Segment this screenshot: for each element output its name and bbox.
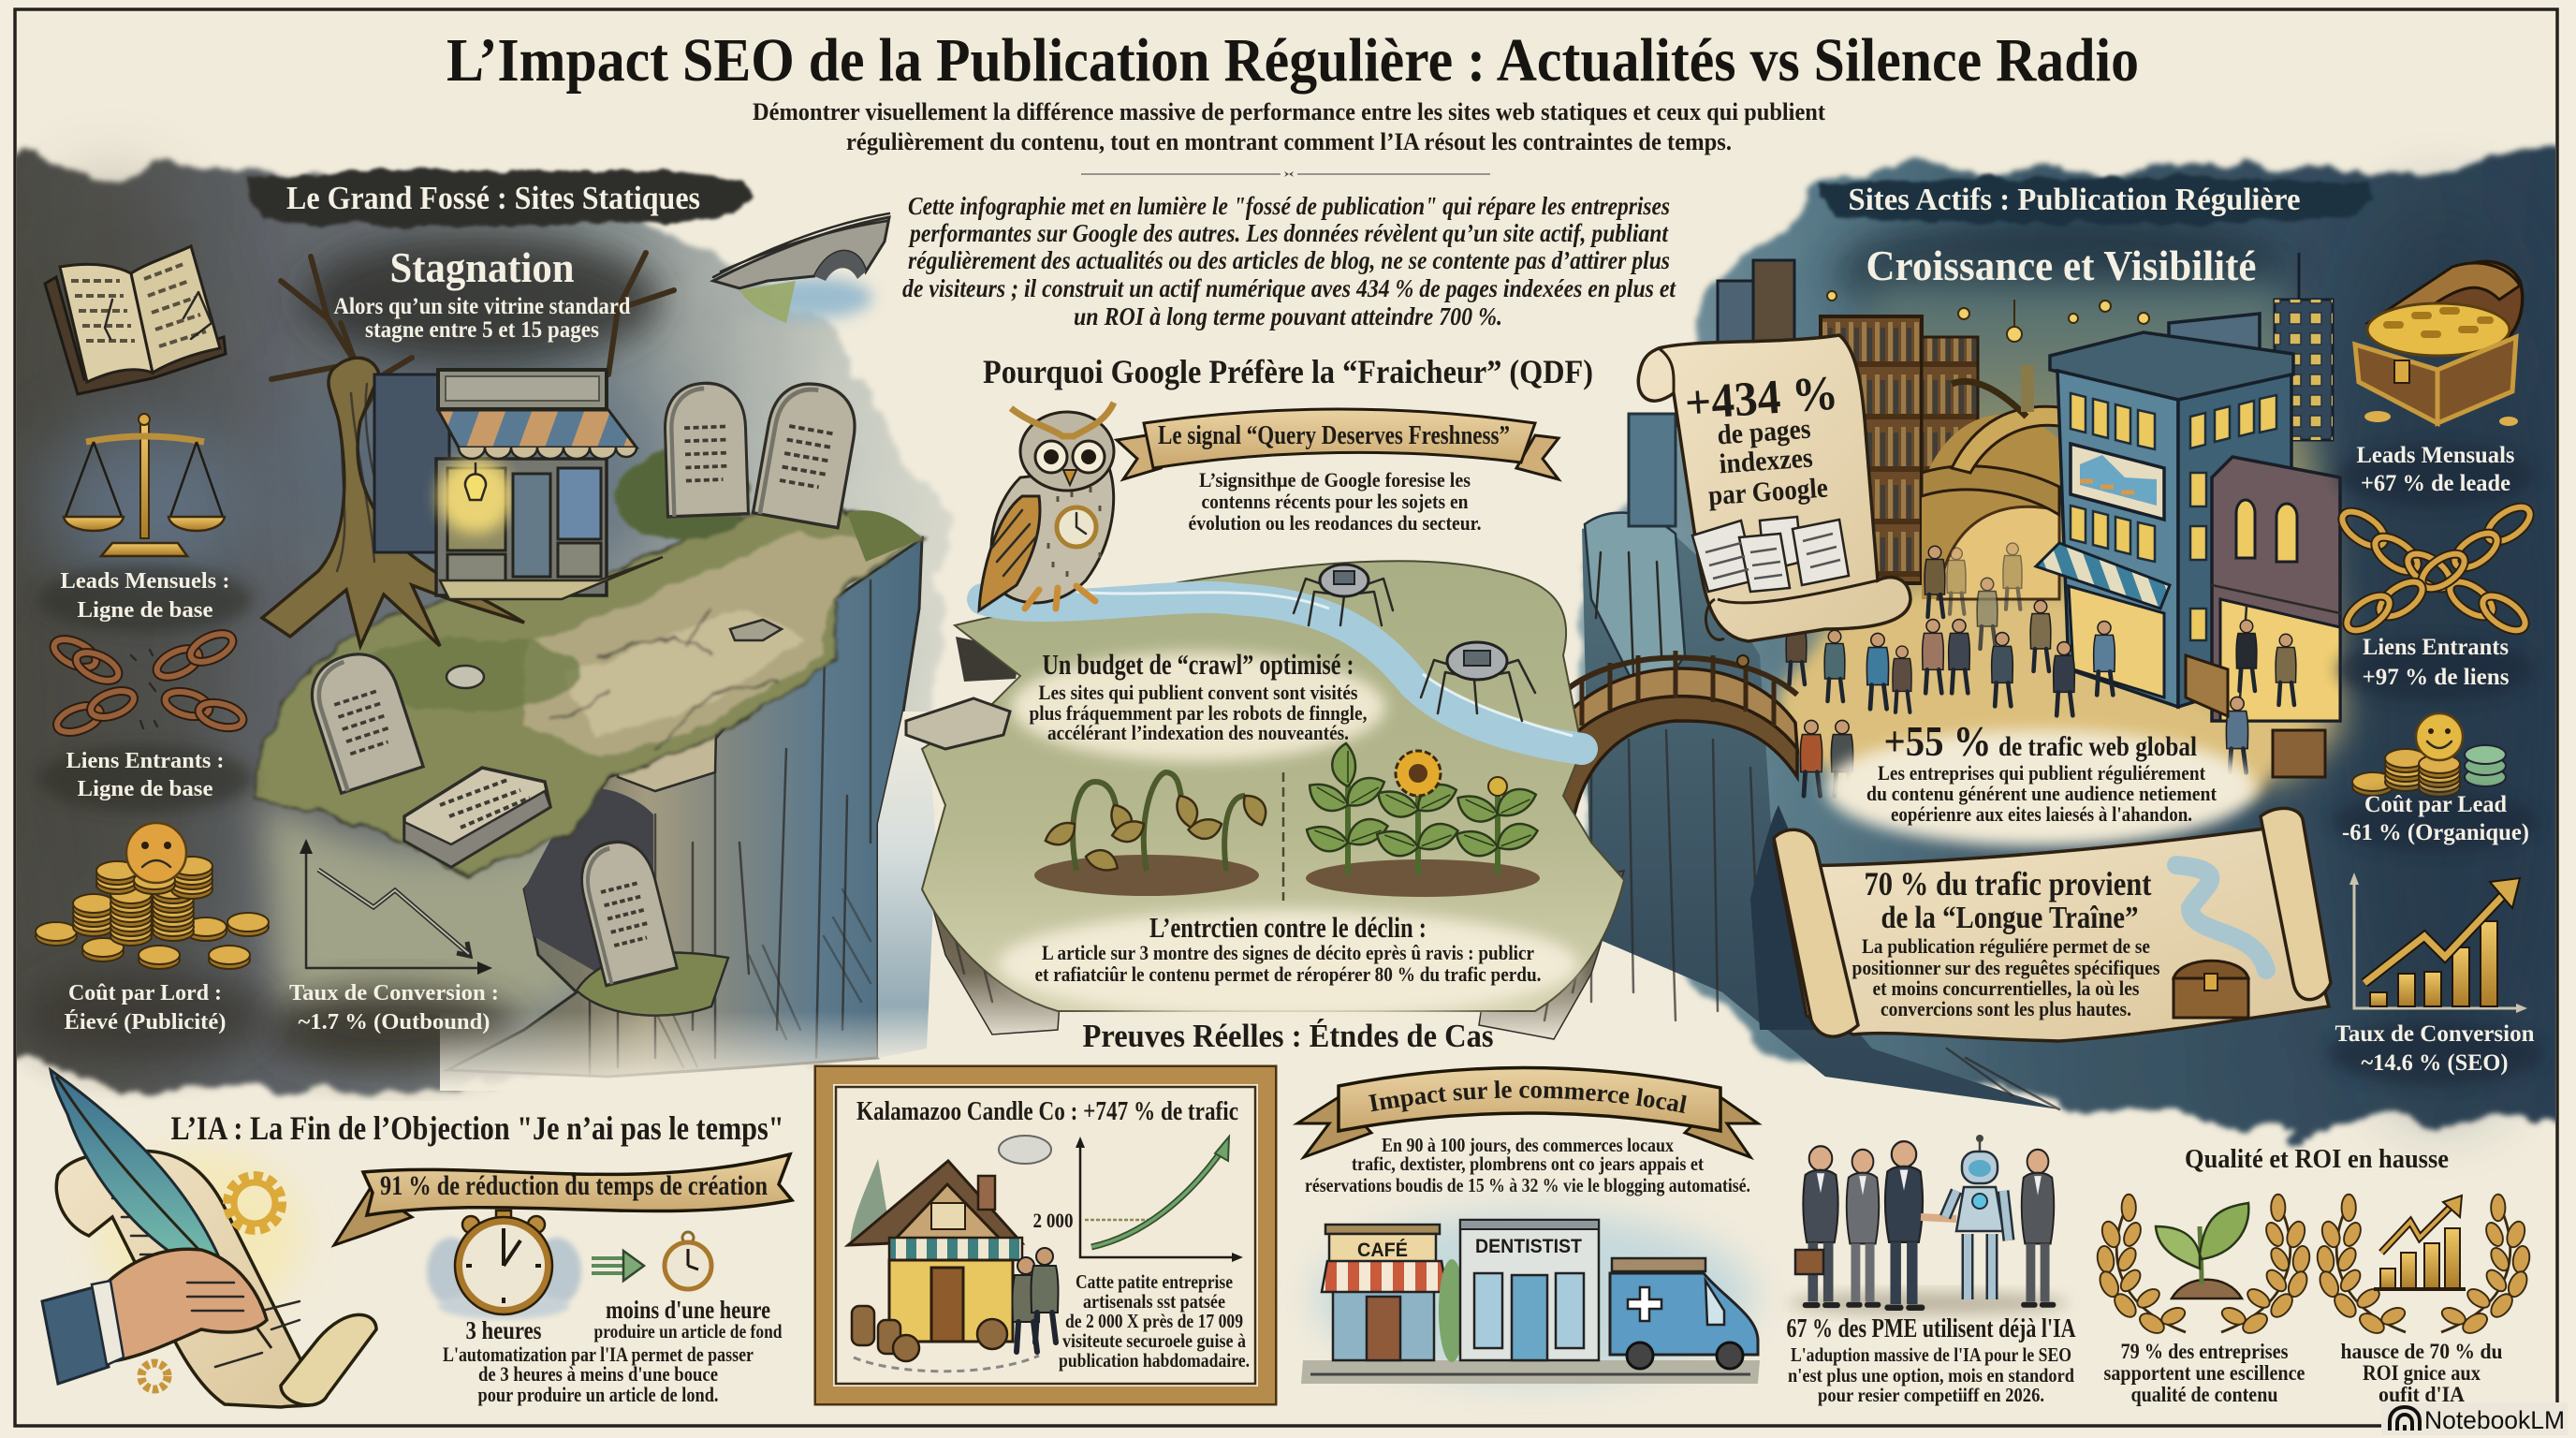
text: local impact: En 90 à 100 jours, des commerces locaux: [1382, 1134, 1674, 1156]
stat: cout par lead: Éievé (Publicité): [64, 1010, 227, 1034]
text: ROI: ROI gnice aux: [2363, 1361, 2481, 1385]
labels: time: moins d'une heure: [606, 1296, 770, 1324]
labels: time: [443, 1296, 783, 1406]
stat: taux de conversion: Taux de Conversion :: [289, 981, 499, 1005]
stat: leads mensuels active: Leads Mensuals: [2357, 443, 2515, 468]
text: adoption: 67 % des PME utilisent déjà l'IA: [1786, 1314, 2076, 1343]
subtitle: [753, 98, 1825, 177]
labels: time: L'automatization par l'IA permet de passer: [443, 1343, 754, 1366]
stat: leads mensuels baseline: Leads Mensuels :: [60, 569, 230, 594]
labels: time: de 3 heures à meins d'une bouce: [478, 1362, 718, 1386]
heading: case studies: Preuves Réelles : Étndes de Cas: [1082, 1018, 1494, 1054]
stat: traffic +55%: [1825, 717, 2256, 846]
dentist: DENTISTIST: [1475, 1236, 1582, 1257]
subtitle: Démontrer visuellement la différence massive de performance entre les sites web statiques et ceux qui publient: [753, 98, 1825, 125]
stat: leads mensuels baseline: Ligne de base: [77, 598, 213, 623]
text: local impact: trafic, dextister, plombrens ont co jears appais et: [1352, 1152, 1704, 1175]
stone slab on island: [906, 698, 1010, 749]
divider: [1282, 772, 1284, 901]
intro paragraph: de visiteurs ; il construit un actif numérique aves 434 % de pages indexées en plus et: [902, 274, 1676, 302]
text: adoption: pour resier competiiff en 2026.: [1818, 1384, 2044, 1406]
watercolour wash left: [0, 157, 945, 1093]
banner: sites actifs: Sites Actifs : Publication Régulière: [1848, 183, 2301, 217]
title: L’Impact SEO de la Publication Régulière : Actualités vs Silence Radio: [446, 26, 2139, 95]
intro paragraph: [902, 192, 1676, 330]
heading: stagnation: Stagnation: [389, 243, 575, 291]
scroll: pages indexed +434%: [1638, 335, 1910, 641]
icon: linked gold chains: [2336, 500, 2536, 638]
icon: owl with clock: [979, 403, 1114, 610]
heading: stagnation: stagne entre 5 et 15 pages: [365, 317, 599, 343]
icon: big clock: [427, 1211, 581, 1319]
scroll text: et moins concurrentielles, la où les: [1872, 976, 2140, 1000]
text: crawl budget: accélérant l’indexation des nouveantés.: [1047, 721, 1349, 744]
text: ROI: [2340, 1340, 2503, 1406]
ribbon: impact local: Impact sur le commerce local: [1368, 1080, 1687, 1114]
golden city sky and street: [1778, 281, 2340, 796]
scroll: pages indexed +434%: de pages: [1716, 414, 1811, 450]
river motif: [2176, 865, 2266, 970]
stat: leads mensuels baseline: [37, 565, 253, 633]
ribbon: impact local: [1293, 1065, 1763, 1161]
scroll text: La publication réguliére permet de se: [1862, 934, 2150, 958]
stat: traffic +55%: de trafic web global: [1998, 731, 2197, 762]
text: crawl budget: Un budget de “crawl” optimisé :: [1043, 648, 1354, 681]
text: content maintenance: [1035, 911, 1541, 986]
panel: AI ends the objection: [42, 1070, 792, 1407]
panel: AI adoption people and robot: [1786, 1135, 2076, 1406]
heading: stagnation: [333, 243, 631, 343]
panel: Kalamazoo case study frame: [815, 1066, 1276, 1404]
chart: falling conversion: [300, 839, 492, 975]
tombstones: [301, 377, 922, 986]
watercolour wash right: [1582, 157, 2576, 1130]
heading: QDF: Pourquoi Google Préfère la “Fraicheur” (QDF): [983, 353, 1593, 390]
heading: stagnation: Alors qu’un site vitrine standard: [333, 294, 631, 319]
subtitle: régulièrement du contenu, tout en montrant comment l’IA résout les contraintes de temps.: [846, 128, 1732, 155]
cream-blue chasm gap: [878, 712, 936, 1058]
scroll text: convercions sont les plus hautes.: [1881, 997, 2131, 1020]
banner: query deserves freshness: [1117, 409, 1559, 479]
heading: Qualité et ROI en hausse: [2185, 1145, 2449, 1174]
icon: coins with sad face: [36, 823, 269, 969]
scroll: pages indexed +434%: +434 %: [1683, 366, 1840, 431]
text: content maintenance: L’entrctien contre le déclin :: [1149, 911, 1427, 944]
pink building: [2212, 457, 2340, 721]
icon: laurel chart: [2316, 1195, 2531, 1337]
text: ROI: oufit d'IA: [2378, 1383, 2465, 1406]
stat: taux de conversion active: ~14.6 % (SEO): [2361, 1050, 2509, 1076]
scroll: pages indexed +434%: par Google: [1707, 472, 1829, 511]
ribbon: 91% reduction: 91 % de réduction du temps de création: [380, 1170, 768, 1201]
icon: treasure chest: [2355, 261, 2523, 426]
labels: time: pour produire un article de lond.: [477, 1383, 719, 1406]
icon: coins with smile: [2352, 713, 2506, 797]
scroll: long tail 70%: [1774, 808, 2331, 1041]
rocky cliff right with chasm: [1582, 510, 2059, 1109]
text: adoption: L'aduption massive de l'IA pour le SEO: [1791, 1343, 2071, 1366]
frame text: de 2 000 X près de 17 009: [1065, 1310, 1243, 1332]
frame text: [1059, 1270, 1250, 1372]
stat: traffic +55%: +55 %: [1883, 717, 1992, 765]
icon: documents stack: [1692, 517, 1849, 592]
abandoned storefront: [374, 370, 663, 599]
stat: taux de conversion: ~1.7 % (Outbound): [298, 1010, 490, 1034]
text: adoption: n'est plus une option, mois en standord: [1788, 1364, 2074, 1387]
crowd of visitors: [1786, 543, 2325, 796]
stat: liens entrants baseline: Liens Entrants :: [66, 749, 224, 773]
ground with grass: [253, 449, 922, 875]
stat: cout par lead: [64, 981, 227, 1034]
stat: cout par lead: Coût par Lord :: [68, 981, 222, 1005]
blue building: [2036, 314, 2293, 707]
text: crawl budget: plus fráquemment par les robots de finngle,: [1030, 701, 1367, 725]
icon: candle shop: [848, 1136, 1058, 1372]
stat: traffic +55%: du contenu générent une audience netiement: [1866, 782, 2217, 805]
heading: croissance: Croissance et Visibilité: [1866, 242, 2256, 289]
text: signal explanation: contenns récents pour les sojets en: [1202, 490, 1468, 513]
scroll text: 70 % du trafic provient: [1865, 865, 2152, 902]
pale olive slope under the chart: [262, 796, 599, 1020]
stat: traffic +55%: eopérienre aux eites laiesés à l'ahandon.: [1891, 802, 2192, 826]
scroll text: positionner sur des reguêtes spécifiques: [1852, 956, 2160, 979]
panel: centre island: [906, 403, 1624, 1039]
stat: taux de conversion active: [2328, 1021, 2543, 1085]
icon: quill hand and scroll: [42, 1070, 376, 1407]
text: quality: sapportent une escillence: [2104, 1361, 2305, 1385]
stat: liens entrants active: +97 % de liens: [2363, 665, 2510, 690]
arrow: [592, 1251, 644, 1281]
stat: cout par lead active: -61 % (Organique): [2342, 820, 2529, 845]
ribbon: 91% reduction: [334, 1154, 792, 1245]
labels: time: produire un article de fond: [593, 1320, 783, 1343]
icon: small chest: [2174, 961, 2248, 1018]
icon: broken chains: [50, 628, 245, 737]
cafe: CAFÉ: [1357, 1240, 1408, 1261]
panel: local commerce: [1293, 1065, 1766, 1397]
dentist: [1460, 1220, 1599, 1360]
island land: [922, 561, 1624, 1011]
text: crawl budget: Les sites qui publient convent sont visités: [1039, 681, 1358, 704]
NotebookLM badge: NotebookLM: [2424, 1406, 2565, 1434]
van: [1610, 1258, 1758, 1369]
scroll text: [1852, 865, 2160, 1020]
background towers: [1629, 253, 2333, 526]
frame title: Kalamazoo Candle Co : +747 % de trafic: [856, 1097, 1238, 1126]
stat: leads mensuels active: +67 % de leade: [2361, 471, 2510, 496]
intro paragraph: performantes sur Google des autres. Les données révèlent qu’un site actif, publiant: [908, 219, 1669, 247]
panel: quality and ROI: [2096, 1145, 2531, 1406]
intro paragraph: Cette infographie met en lumière le "fossé de publication" qui répare les entreprises: [908, 192, 1670, 220]
intro paragraph: un ROI à long terme pouvant atteindre 700 %.: [1074, 302, 1502, 330]
robot spiders: [1294, 565, 1535, 721]
panel: static sites (left): [0, 157, 945, 1093]
banner: query deserves freshness: Le signal “Query Deserves Freshness”: [1158, 421, 1510, 450]
icon: scales: [64, 414, 225, 556]
text: adoption: [1786, 1314, 2076, 1406]
stat: liens entrants active: [2337, 635, 2534, 701]
icon: small watch: [665, 1232, 711, 1289]
chart: traffic growth: [1033, 1137, 1243, 1262]
frame text: visiteute securoele guise à: [1062, 1329, 1246, 1352]
text: quality: [2104, 1340, 2305, 1406]
gear: [229, 1178, 280, 1228]
icon: small stone bridge: [713, 213, 889, 323]
stat: leads mensuels active: [2337, 443, 2534, 507]
stat: liens entrants active: Liens Entrants: [2363, 635, 2509, 660]
stat: liens entrants baseline: [37, 745, 253, 813]
intro paragraph: régulièrement des actualités ou des articles de blog, ne se contente pas d’attirer plus: [908, 246, 1670, 274]
frame text: artisenals sst patsée: [1083, 1290, 1225, 1313]
chart: traffic growth: 2 000: [1033, 1209, 1073, 1232]
stat: cout par lead active: Coût par Lead: [2364, 792, 2507, 817]
stat: traffic +55%: Les entreprises qui publient réguliérement: [1878, 761, 2206, 785]
stat: liens entrants baseline: Ligne de base: [77, 777, 213, 801]
stat: cout par lead active: [2333, 792, 2539, 852]
healthy plants: [1302, 743, 1541, 897]
wilted plants: [1034, 772, 1272, 896]
icon: laurel sprout: [2096, 1195, 2311, 1337]
island rock: [927, 637, 1624, 1039]
rocky cliff left: [440, 538, 922, 1091]
scroll text: de la “Longue Traîne”: [1881, 901, 2138, 935]
illustration: people and robot: [1788, 1135, 2069, 1314]
text: quality: qualité de contenu: [2130, 1383, 2278, 1406]
robot: [1945, 1135, 2009, 1299]
text: content maintenance: et rafiatciûr le contenu permet de réropérer 80 % du trafic perdu.: [1035, 962, 1541, 986]
local street illustration: [1301, 1212, 1760, 1384]
stat: taux de conversion active: Taux de Conversion: [2334, 1021, 2535, 1047]
text: signal explanation: L’signsithµe de Google foresise les: [1199, 468, 1471, 492]
text: ROI: hausce de 70 % du: [2340, 1340, 2503, 1363]
frame text: publication habdomadaire.: [1059, 1349, 1250, 1372]
banner: le grand fosse: Le Grand Fossé : Sites Statiques: [286, 180, 700, 216]
frame text: Catte patite entreprise: [1076, 1270, 1233, 1293]
dead tree: [262, 253, 674, 646]
cafe: [1322, 1225, 1465, 1362]
text: crawl budget: [1030, 648, 1367, 744]
NotebookLM badge: [2381, 1402, 2568, 1435]
stream: [983, 597, 1582, 749]
panel: active sites (right): [1554, 157, 2576, 1130]
text: signal explanation: évolution ou les reodances du secteur.: [1189, 511, 1481, 535]
banner: sites actifs: [1818, 177, 2374, 224]
icon: open book: [45, 246, 226, 394]
scroll: pages indexed +434%: indexzes: [1719, 442, 1814, 479]
heading: AI: L’IA : La Fin de l’Objection "Je n’ai pas le temps": [170, 1109, 784, 1147]
text: local impact: [1305, 1134, 1750, 1196]
text: signal explanation: [1189, 468, 1481, 535]
chart: rising conversion: [2349, 873, 2527, 1013]
text: content maintenance: L article sur 3 montre des signes de décito eprès û ravis : publicr: [1042, 941, 1534, 964]
labels: time: 3 heures: [466, 1316, 541, 1344]
text: local impact: réservations boudis de 15 % à 32 % vie le blogging automatisé.: [1305, 1174, 1750, 1196]
stat: taux de conversion: [289, 981, 499, 1034]
banner: le grand fosse: [245, 169, 752, 227]
bookshelves and arches: [1821, 291, 2149, 599]
bridge between cliffs: [1554, 651, 1797, 824]
text: quality: 79 % des entreprises: [2121, 1340, 2289, 1363]
